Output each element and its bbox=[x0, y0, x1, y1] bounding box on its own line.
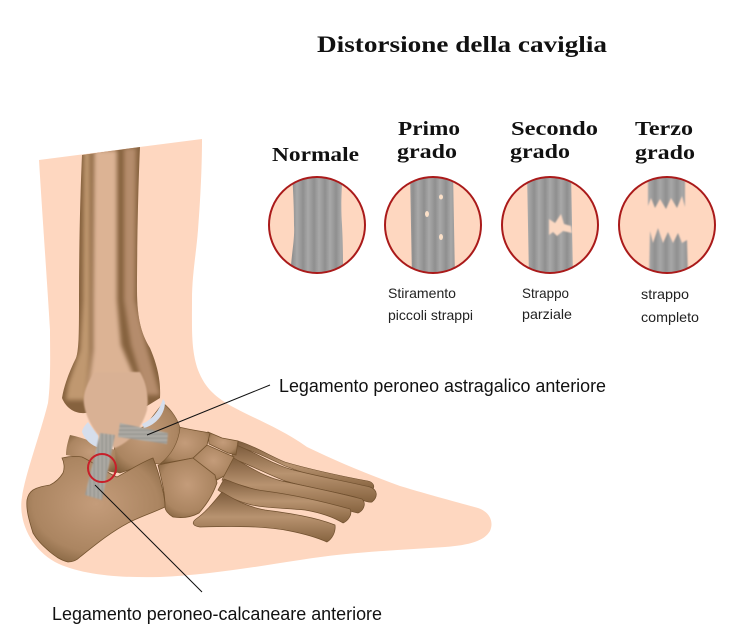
heading: Secondo grado: grado bbox=[510, 141, 570, 163]
caption: third degree bbox=[641, 286, 699, 325]
caption: second degree: Strappo bbox=[522, 285, 569, 301]
cuneiform upper bbox=[208, 432, 238, 455]
calcaneus bbox=[27, 456, 165, 562]
heading: Secondo grado: Secondo bbox=[511, 118, 598, 140]
heading: Terzo grado: grado bbox=[635, 142, 695, 164]
injury marker bbox=[88, 454, 116, 482]
heading: Primo grado: grado bbox=[397, 141, 457, 163]
heading: Primo grado: Primo bbox=[398, 118, 460, 140]
title: Distorsione della caviglia bbox=[317, 32, 608, 57]
cuboid bbox=[158, 458, 217, 518]
panel: third degree bbox=[619, 170, 715, 280]
right strip bbox=[124, 148, 160, 395]
caption: first degree: Stiramento bbox=[388, 285, 456, 301]
heading: Terzo grado bbox=[635, 118, 695, 164]
talus neck bbox=[110, 403, 180, 473]
illustration: foot bones bbox=[27, 140, 376, 562]
panel: first degree bbox=[385, 170, 481, 280]
ligament: anterior calcaneofibular bbox=[85, 433, 115, 500]
metatarsal 2 bbox=[218, 479, 351, 523]
heading: Terzo grado: Terzo bbox=[635, 118, 693, 140]
heading: Primo grado bbox=[397, 118, 460, 163]
ligament: anterior talofibular bbox=[118, 423, 168, 444]
caption: second degree: parziale bbox=[522, 306, 572, 322]
fibula strip bbox=[66, 150, 90, 400]
heading: Secondo grado bbox=[510, 118, 598, 163]
shin bones and ankle bbox=[62, 147, 160, 414]
metatarsal 3 bbox=[222, 457, 364, 513]
heading: Normale: Normale bbox=[272, 144, 359, 166]
cuneiform middle bbox=[193, 445, 234, 480]
caption: first degree: piccoli strappi bbox=[388, 307, 473, 323]
talus rear lobe bbox=[66, 435, 117, 473]
caption: third degree: completo bbox=[641, 309, 699, 325]
navicular bbox=[160, 426, 210, 464]
metatarsal 1 bbox=[193, 492, 335, 542]
caption: second degree bbox=[522, 285, 572, 322]
ankle talar dome bbox=[84, 372, 148, 448]
panel: normal ligament bbox=[269, 170, 365, 280]
label: upper ligament: Legamento peroneo astragalico anteriore bbox=[279, 376, 606, 396]
panel: second degree bbox=[502, 170, 598, 280]
illustration: foot skin silhouette bbox=[21, 139, 491, 577]
leader lines bbox=[95, 385, 270, 592]
cartilage bbox=[82, 399, 165, 448]
tibia strip bbox=[86, 150, 135, 388]
metatarsal 4 bbox=[231, 445, 376, 502]
caption: first degree bbox=[388, 285, 473, 323]
caption: third degree: strappo bbox=[641, 286, 689, 302]
label: lower ligament: Legamento peroneo-calcaneare anteriore bbox=[52, 604, 382, 624]
metatarsal 5 bbox=[238, 441, 374, 489]
